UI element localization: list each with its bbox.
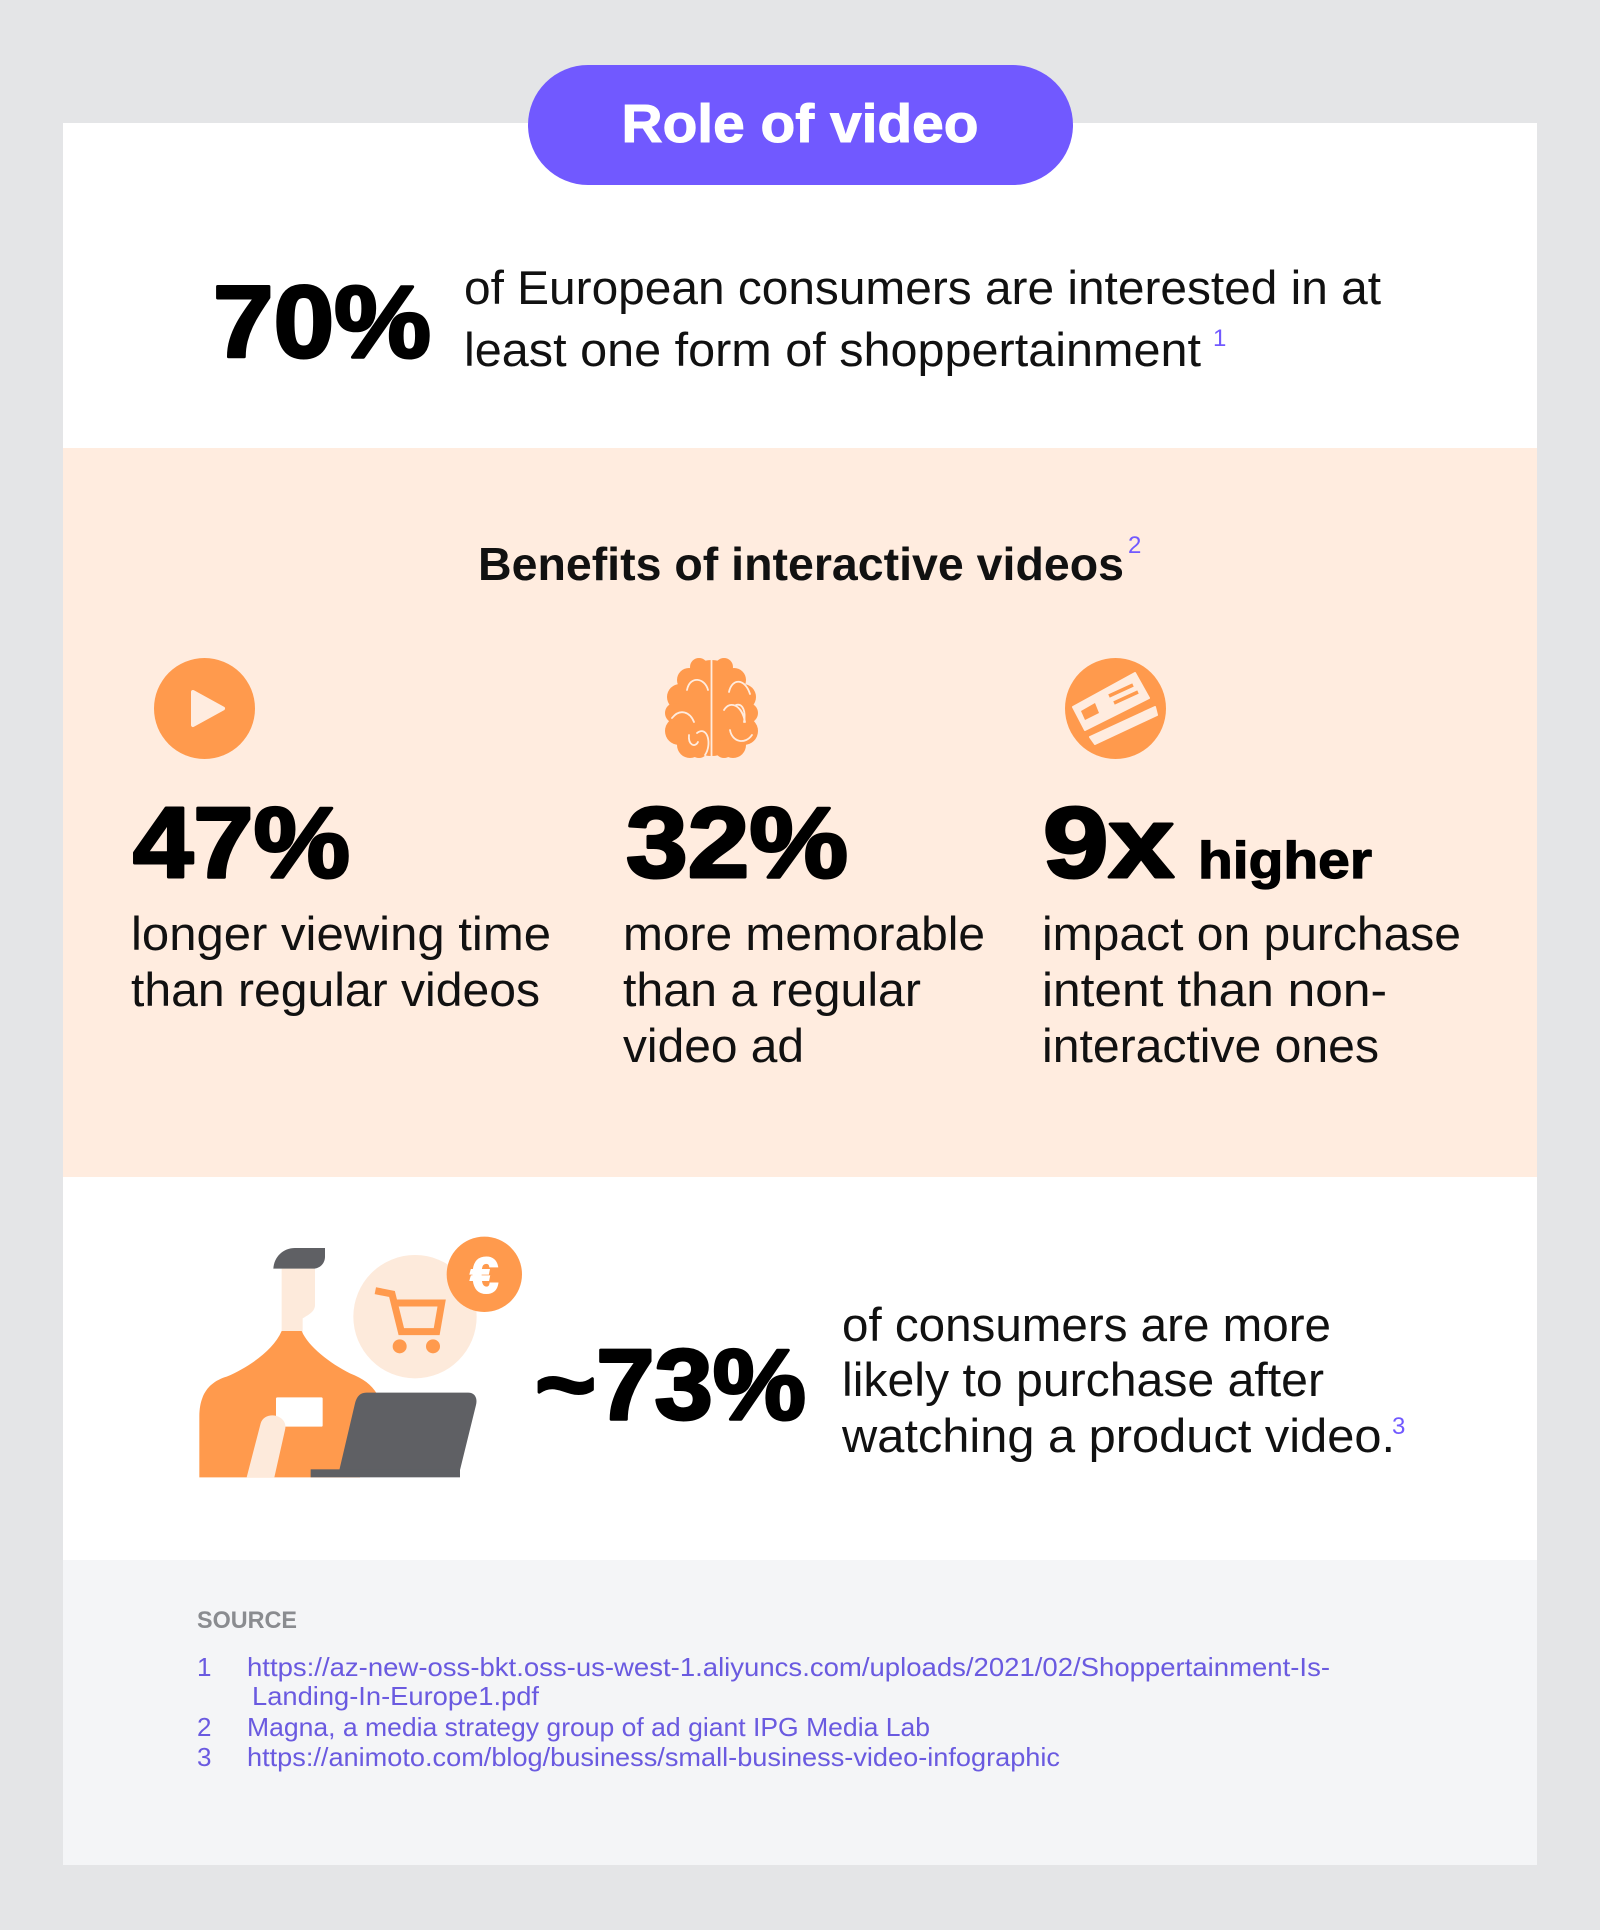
intro statement: of European consumers are interested in at xyxy=(464,261,1381,314)
source list: 1 xyxy=(197,1652,211,1682)
source list: Magna, a media strategy group of ad giant IPG Media Lab xyxy=(247,1712,930,1742)
intro statement: 1 xyxy=(1213,325,1226,352)
source list: 2 xyxy=(197,1712,211,1742)
big number: ~73%: ~73% xyxy=(535,1329,806,1441)
big number: 70%: 70% xyxy=(213,265,431,379)
purchase statement: 3 xyxy=(1392,1413,1405,1440)
source list: 3 xyxy=(197,1742,211,1772)
benefit 1: 47%: longer viewing time xyxy=(131,907,551,960)
source list: https://az-new-oss-bkt.oss-us-west-1.aliyuncs.com/uploads/2021/02/Shoppertainment-Is- xyxy=(247,1652,1330,1682)
illustration: shopper with laptop: € xyxy=(470,1247,498,1303)
panel: sources xyxy=(63,1560,1537,1865)
source list: https://animoto.com/blog/business/small-business-video-infographic xyxy=(247,1742,1060,1772)
benefits heading: Benefits of interactive videos xyxy=(478,538,1124,590)
title pill: Role of video xyxy=(622,94,978,154)
source list xyxy=(197,1652,1330,1772)
icon: card xyxy=(1065,658,1166,759)
benefit 1: 47%: than regular videos xyxy=(131,963,540,1016)
icon: play button xyxy=(154,658,255,759)
benefit 3: 9x higher: higher xyxy=(1198,832,1372,890)
benefits heading: 2 xyxy=(1128,532,1141,559)
source list: Landing-In-Europe1.pdf xyxy=(252,1681,540,1711)
source heading: SOURCE xyxy=(197,1607,297,1634)
benefit 2: 32%: than a regular xyxy=(623,963,921,1016)
title pill xyxy=(528,65,1073,185)
benefit 3: 9x higher: impact on purchase xyxy=(1042,907,1461,960)
intro statement xyxy=(464,261,1381,376)
icon: brain xyxy=(665,657,758,758)
benefit 3: 9x higher: interactive ones xyxy=(1042,1019,1379,1072)
benefit 1: 47% xyxy=(131,787,551,1016)
purchase statement xyxy=(841,1298,1405,1462)
benefit 3: 9x higher: intent than non- xyxy=(1042,963,1387,1016)
panel: intro statistic xyxy=(63,123,1537,448)
benefit 1: 47%: 47% xyxy=(133,787,350,899)
illustration: shopper with laptop xyxy=(199,1237,522,1477)
purchase statement: watching a product video. xyxy=(841,1409,1395,1462)
benefit 2: 32%: 32% xyxy=(626,787,848,899)
benefit 2: 32%: more memorable xyxy=(623,907,985,960)
panel: purchase statistic xyxy=(63,1177,1537,1560)
benefit 2: 32%: video ad xyxy=(623,1019,804,1072)
purchase statement: of consumers are more xyxy=(842,1298,1331,1351)
panel: benefits of interactive videos xyxy=(63,448,1537,1177)
benefit 2: 32% xyxy=(623,787,985,1072)
intro statement: least one form of shoppertainment xyxy=(464,323,1201,376)
purchase statement: likely to purchase after xyxy=(842,1353,1324,1406)
benefit 3: 9x higher xyxy=(1042,787,1461,1072)
benefit 3: 9x higher: 9x xyxy=(1043,787,1174,899)
